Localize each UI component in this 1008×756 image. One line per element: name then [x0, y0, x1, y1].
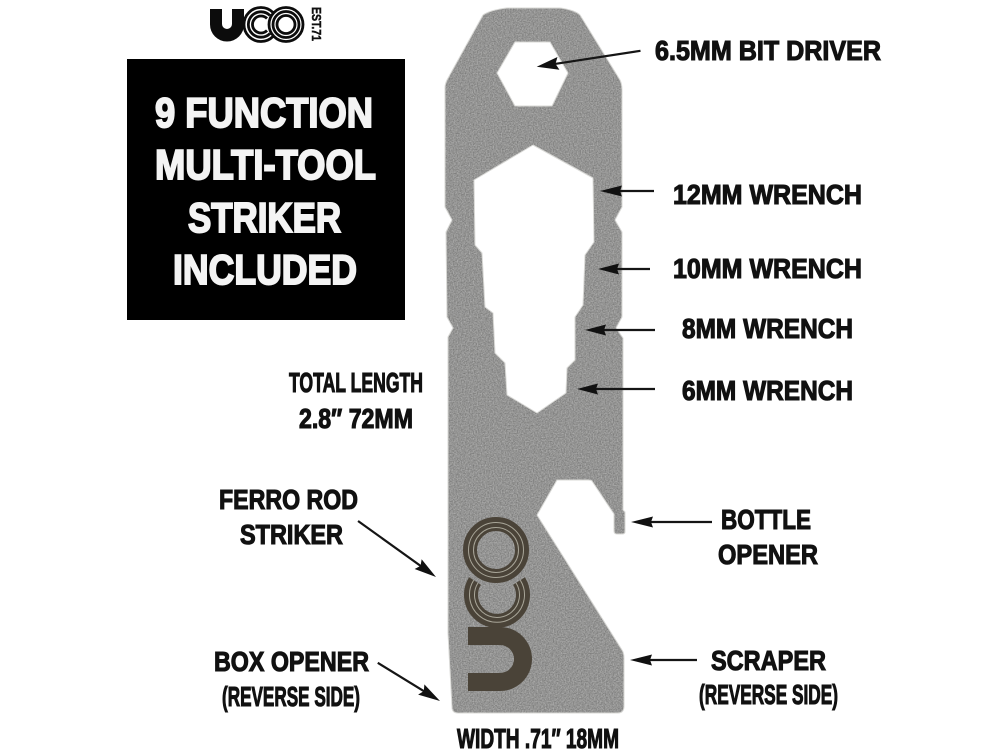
label: bit driver: 6.5MM BIT DRIVER — [655, 35, 881, 66]
heading: included: INCLUDED — [173, 246, 357, 293]
label: box opener reverse side: (REVERSE SIDE) — [222, 681, 360, 712]
arrow: bit driver — [536, 44, 641, 73]
label: 10mm wrench: 10MM WRENCH — [673, 253, 862, 284]
heading: 9 function: 9 FUNCTION — [155, 89, 373, 136]
label: total length value: 2.8″ 72MM — [299, 403, 413, 434]
engraved logo: U — [468, 627, 532, 691]
heading: striker: STRIKER — [188, 194, 341, 241]
panel: black headline box — [127, 59, 405, 320]
label: opener: OPENER — [718, 539, 818, 570]
multi-tool body — [445, 8, 625, 713]
label: scraper: SCRAPER — [711, 645, 826, 676]
arrow: 8mm wrench — [585, 324, 655, 336]
label: striker: STRIKER — [240, 519, 343, 550]
label: box opener: BOX OPENER — [214, 646, 369, 677]
arrow: box opener — [375, 658, 443, 706]
arrow: 6mm wrench — [577, 384, 655, 394]
label: 12mm wrench: 12MM WRENCH — [673, 179, 862, 210]
engraved logo: O rings — [468, 522, 524, 578]
arrow: 10mm wrench — [598, 264, 650, 274]
label: bottle: BOTTLE — [721, 504, 811, 535]
arrow: 12mm wrench — [600, 186, 654, 196]
UCO logo — [210, 7, 324, 42]
label: total length: TOTAL LENGTH — [289, 367, 423, 398]
label: 8mm wrench: 8MM WRENCH — [682, 313, 853, 344]
label: ferro rod: FERRO ROD — [219, 484, 358, 515]
arrow: scraper — [630, 654, 697, 666]
UCO logo: EST.71 — [309, 7, 324, 41]
arrow: ferro rod striker — [355, 516, 440, 582]
arrow: bottle opener — [631, 516, 712, 528]
engraved logo: C rings — [470, 580, 524, 622]
heading: multi-tool: MULTI-TOOL — [155, 141, 376, 188]
label: scraper reverse side: (REVERSE SIDE) — [699, 679, 838, 710]
label: 6mm wrench: 6MM WRENCH — [682, 375, 853, 406]
label: width: WIDTH .71″ 18MM — [457, 723, 619, 754]
